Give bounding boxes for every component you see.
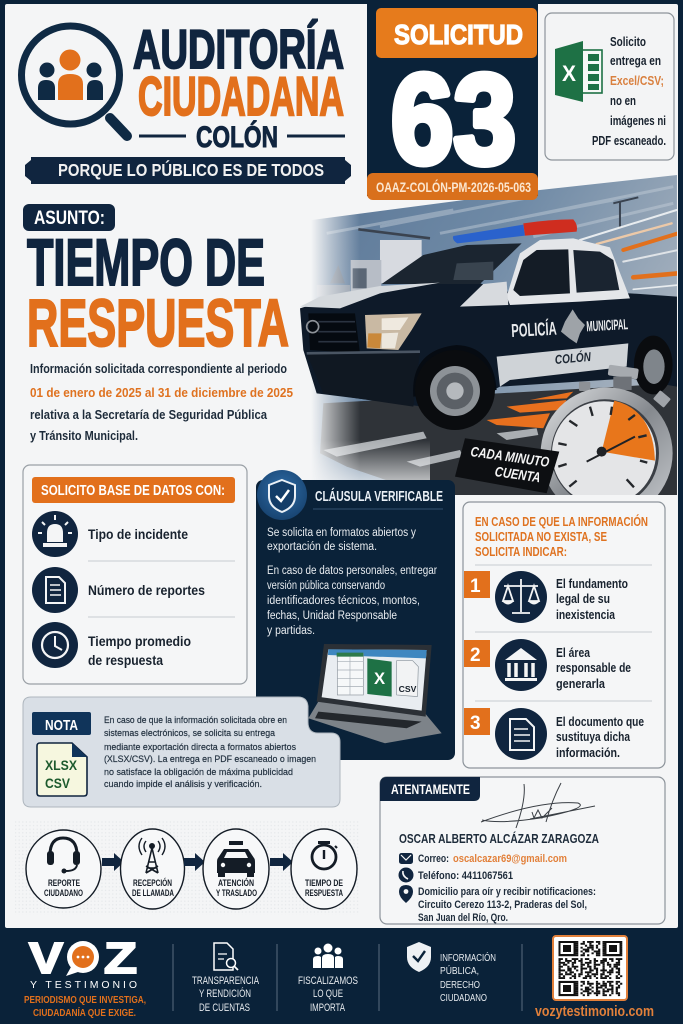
nota text: sistemas electrónicos, se solicita su entrega — [104, 728, 276, 739]
step: reporte ciudadano — [26, 830, 101, 908]
email: Correo: — [418, 853, 449, 865]
main heading: tiempo de respuesta — [27, 225, 289, 361]
atentamente label — [380, 777, 480, 801]
intro paragraph: relativa a la Secretaría de Seguridad Pública — [30, 408, 268, 422]
icon: shield badge — [257, 470, 307, 520]
item 3: documento sustituto — [464, 708, 644, 760]
truck: MUNICIPAL — [586, 317, 628, 335]
panel heading: SOLICITA INDICAR: — [475, 544, 567, 559]
icon: location pin — [399, 885, 413, 903]
item 1: fundamento legal: El fundamento — [556, 576, 628, 591]
panel: nota — [23, 697, 340, 807]
item 3: documento sustituto: información. — [556, 745, 620, 760]
step: atencion y traslado — [203, 829, 269, 909]
item 3: documento sustituto: sustituya dicha — [556, 729, 631, 744]
step: recepcion de llamada: RECEPCIÓN — [133, 877, 172, 889]
item: numero de reportes: Número de reportes — [88, 582, 205, 598]
main heading: tiempo de respuesta: TIEMPO DE — [27, 225, 265, 299]
title: Auditoría Ciudadana Colón: CIUDADANA — [138, 65, 344, 127]
website: vozytestimonio.com — [535, 1003, 654, 1020]
delivery text: Solicito — [610, 34, 646, 49]
panel header — [32, 477, 235, 503]
intro paragraph — [30, 362, 293, 443]
footer: fiscalizamos — [298, 944, 358, 1014]
folio — [367, 173, 538, 200]
footer: transparencia: TRANSPARENCIA — [192, 975, 259, 987]
title: Auditoría Ciudadana Colón: COLÓN — [196, 120, 278, 154]
title: Auditoría Ciudadana Colón: AUDITORÍA — [133, 18, 344, 80]
icon: xlsx csv file: XLSX — [45, 757, 78, 773]
delivery text — [592, 34, 666, 148]
bottom brush fade — [290, 440, 430, 498]
footer: informacion publica: PÚBLICA, — [440, 964, 479, 977]
email — [418, 853, 567, 865]
icon: excel: X — [562, 61, 576, 86]
number 63: 63 — [391, 48, 516, 190]
clausula text — [267, 527, 437, 637]
panel heading: SOLICITADA NO EXISTA, SE — [475, 529, 607, 544]
laptop illustration: CSV — [399, 684, 417, 694]
address: Circuito Cerezo 113-2, Praderas del Sol, — [418, 899, 587, 911]
item 1: fundamento legal: inexistencia — [556, 607, 616, 622]
footer: fiscalizamos: FISCALIZAMOS — [298, 975, 358, 987]
footer: informacion publica — [407, 942, 496, 1004]
clausula text: Se solicita en formatos abiertos y — [267, 527, 416, 539]
icon: speech bubble — [66, 941, 99, 976]
clausula text: En caso de datos personales, entregar — [267, 565, 437, 577]
badge: cada minuto cuenta: CADA MINUTO — [470, 443, 550, 470]
nota text: (XLSX/CSV). La entrega en PDF escaneado o imagen — [104, 754, 316, 765]
laptop illustration: X — [374, 669, 385, 688]
arrow 1 — [102, 853, 124, 871]
address: Domicilio para oír y recibir notificaciones: — [418, 886, 596, 898]
intro paragraph: y Tránsito Municipal. — [30, 429, 138, 443]
arrow 2 — [184, 853, 205, 871]
panel: excel delivery note — [545, 13, 674, 160]
left brush fade — [290, 200, 360, 490]
asunto badge: ASUNTO: — [34, 208, 105, 229]
nota label — [32, 712, 91, 735]
step: reporte ciudadano: REPORTE — [48, 878, 80, 889]
step: tiempo de respuesta: RESPUESTA — [305, 888, 343, 899]
item: tipo de incidente — [32, 511, 188, 557]
intro paragraph: 01 de enero de 2025 al 31 de diciembre de 2025 — [30, 386, 293, 400]
delivery text: no en — [610, 93, 636, 108]
footer logo: voz y testimonio: Y TESTIMONIO — [30, 979, 137, 991]
clausula text: versión pública conservando — [267, 580, 385, 592]
item 2: area responsable: El área — [556, 645, 591, 660]
item 2: area responsable: responsable de — [556, 660, 631, 675]
phone: Teléfono: 4411067561 — [418, 870, 513, 882]
process flow — [15, 820, 360, 915]
footer logo: voz y testimonio: Z — [104, 934, 137, 983]
item: tiempo promedio: Tiempo promedio — [88, 633, 191, 649]
clausula text: identificadores técnicos, montos, — [267, 595, 420, 607]
badge: cada minuto cuenta: CUENTA — [494, 463, 542, 485]
signature — [481, 783, 595, 828]
item: tipo de incidente: Tipo de incidente — [88, 526, 188, 542]
step: atencion y traslado: Y TRASLADO — [216, 888, 257, 899]
slogan banner: PORQUE LO PÚBLICO ES DE TODOS — [58, 159, 324, 180]
panel heading — [475, 514, 648, 559]
arrow 3 — [270, 853, 293, 871]
footer: transparencia: Y RENDICIÓN — [199, 987, 251, 1000]
delivery text: imágenes ni — [610, 113, 666, 128]
step: tiempo de respuesta: TIEMPO DE — [305, 878, 343, 889]
truck: POLICÍA — [511, 318, 557, 341]
delivery text: entrega en — [610, 53, 661, 68]
folio: OAAZ-COLÓN-PM-2026-05-063 — [376, 180, 531, 195]
panel: clausula verificable — [256, 470, 455, 760]
icon: xlsx csv file — [37, 743, 87, 796]
step: tiempo de respuesta — [291, 829, 357, 909]
signer name: OSCAR ALBERTO ALCÁZAR ZARAGOZA — [399, 831, 599, 846]
asunto badge — [23, 204, 115, 231]
nota text: no satisface la obligación de máxima publicidad — [104, 767, 293, 778]
logo: magnifier with citizens — [22, 26, 127, 136]
hero illustration: police truck — [290, 175, 678, 519]
step: recepcion de llamada — [120, 829, 184, 909]
solicitud label — [376, 8, 537, 58]
nota text: En caso de que la información solicitada obre en — [104, 715, 287, 726]
footer logo: voz y testimonio: PERIODISMO QUE INVESTIGA, — [24, 995, 146, 1006]
clausula heading: CLÁUSULA VERIFICABLE — [315, 488, 443, 505]
footer: transparencia: DE CUENTAS — [199, 1002, 250, 1014]
footer logo: voz y testimonio: CIUDADANÍA QUE EXIGE. — [33, 1006, 136, 1019]
footer: informacion publica: INFORMACIÓN — [440, 951, 496, 964]
truck: COLÓN — [554, 349, 592, 367]
step: atencion y traslado: ATENCIÓN — [218, 877, 254, 889]
panel header: SOLICITO BASE DE DATOS CON: — [41, 483, 225, 499]
nota text — [104, 715, 316, 790]
clausula text: exportación de sistema. — [267, 541, 377, 553]
icon: excel — [555, 41, 602, 102]
footer logo: voz y testimonio — [24, 934, 146, 1019]
footer: informacion publica: DERECHO — [440, 979, 480, 991]
step: reporte ciudadano: CIUDADANO — [44, 888, 83, 899]
clausula text: fechas, Unidad Responsable — [267, 610, 397, 622]
item: tiempo promedio: de respuesta — [88, 652, 163, 668]
item 1: fundamento legal — [464, 571, 628, 623]
step: recepcion de llamada: DE LLAMADA — [132, 888, 174, 899]
item: numero de reportes — [32, 567, 205, 613]
truck — [300, 219, 677, 430]
slogan banner — [25, 157, 351, 184]
panel: solicitud 63 — [367, 0, 538, 200]
item 3: documento sustituto: 3 — [470, 713, 481, 734]
icon: xlsx csv file: CSV — [45, 775, 71, 791]
email: oscalcazar69@gmail.com — [453, 853, 567, 865]
footer: informacion publica: CIUDADANO — [440, 992, 487, 1004]
icon: mail — [399, 853, 413, 864]
intro paragraph: Información solicitada correspondiente al periodo — [30, 362, 287, 376]
laptop illustration — [308, 644, 442, 743]
title: Auditoría Ciudadana Colón — [133, 18, 345, 154]
solicitud label: SOLICITUD — [394, 19, 523, 50]
panel: informacion inexistente — [463, 502, 665, 768]
footer: fiscalizamos: IMPORTA — [310, 1002, 345, 1014]
footer: fiscalizamos: LO QUE — [313, 988, 343, 1000]
atentamente label: ATENTAMENTE — [391, 782, 470, 797]
nota text: cuando impide el análisis y verificación. — [104, 779, 262, 790]
badge: cada minuto cuenta — [455, 438, 559, 493]
item 3: documento sustituto: El documento que — [556, 714, 644, 729]
item 1: fundamento legal: 1 — [470, 576, 481, 597]
item 2: area responsable — [464, 639, 631, 691]
qr code — [553, 936, 627, 1000]
nota text: mediante exportación directa a formatos abiertos — [104, 742, 296, 753]
item 2: area responsable: 2 — [470, 645, 481, 666]
icon: phone — [398, 868, 414, 882]
footer logo: voz y testimonio: V — [29, 934, 64, 983]
item 1: fundamento legal: legal de su — [556, 591, 610, 606]
panel: solicito base de datos — [23, 465, 247, 684]
clausula text: y partidas. — [267, 625, 315, 637]
item 2: area responsable: generarla — [556, 676, 606, 691]
nota label: NOTA — [45, 717, 78, 734]
main heading: tiempo de respuesta: RESPUESTA — [27, 286, 289, 361]
panel: atentamente — [380, 777, 665, 924]
item: tiempo promedio — [32, 622, 191, 668]
footer — [0, 928, 683, 1024]
sky and road backdrop — [297, 175, 678, 495]
delivery text: Excel/CSV; — [610, 73, 664, 88]
footer: transparencia — [192, 943, 259, 1014]
address: San Juan del Río, Qro. — [418, 912, 508, 924]
address — [418, 886, 596, 924]
stopwatch — [540, 364, 673, 495]
